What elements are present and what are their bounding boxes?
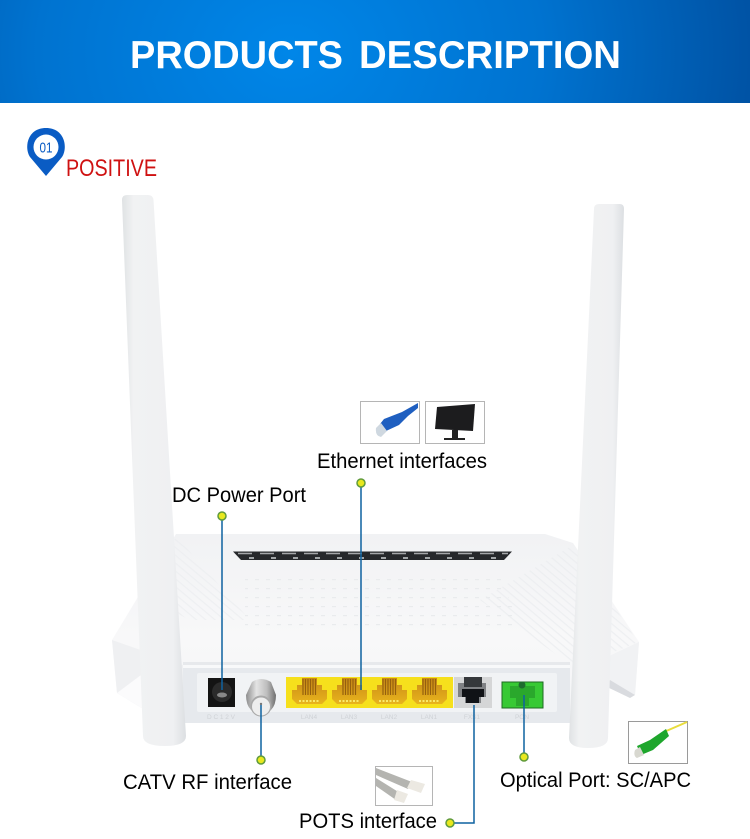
port captions [207, 714, 529, 721]
header banner [0, 0, 750, 103]
port captions: LAN4 [301, 714, 318, 721]
speaker dot grid [245, 575, 520, 628]
label: DC Power Port [172, 484, 306, 507]
callout: Ethernet interfaces [317, 402, 487, 690]
port captions: LAN3 [341, 714, 358, 721]
callout: DC Power Port [172, 484, 306, 690]
icon: monitor [426, 402, 484, 444]
label: CATV RF interface [123, 771, 292, 794]
port captions: LAN2 [381, 714, 398, 721]
left antenna [122, 195, 186, 746]
callout: Optical Port [500, 695, 691, 792]
leader line [218, 512, 226, 690]
icon: phone cable [376, 766, 432, 806]
port captions: FXS1 [464, 714, 481, 721]
callout: POTS interface [299, 705, 474, 833]
label: Ethernet interfaces [317, 450, 487, 473]
rear panel [183, 665, 570, 723]
title: PRODUCTS [130, 34, 343, 77]
icon: location pin: 01 [40, 140, 52, 156]
DC power port [208, 678, 235, 707]
router body [112, 534, 639, 723]
title: DESCRIPTION [359, 34, 621, 77]
label: POTS interface [299, 810, 437, 833]
port captions: DC12V [207, 714, 236, 721]
leader line [357, 479, 365, 690]
POTS port [454, 677, 492, 708]
LED panel [233, 552, 512, 560]
icon: SC/APC fiber connector [628, 722, 688, 764]
section marker: 01 positive [27, 128, 157, 182]
leader line [446, 705, 474, 827]
icon: network cable [360, 402, 420, 444]
yellow LAN ports [286, 677, 453, 708]
right antenna [569, 204, 624, 748]
callout: CATV RF interface [123, 705, 292, 794]
label: Optical Port: SC/APC [500, 769, 691, 792]
optical port [502, 682, 543, 708]
section label: POSITIVE [66, 155, 157, 182]
leader line [520, 695, 528, 761]
leader line [257, 705, 265, 764]
router illustration [112, 195, 639, 748]
title [130, 34, 621, 77]
CATV connector [246, 679, 276, 716]
port captions: LAN1 [421, 714, 438, 721]
port captions: PON [515, 714, 529, 721]
